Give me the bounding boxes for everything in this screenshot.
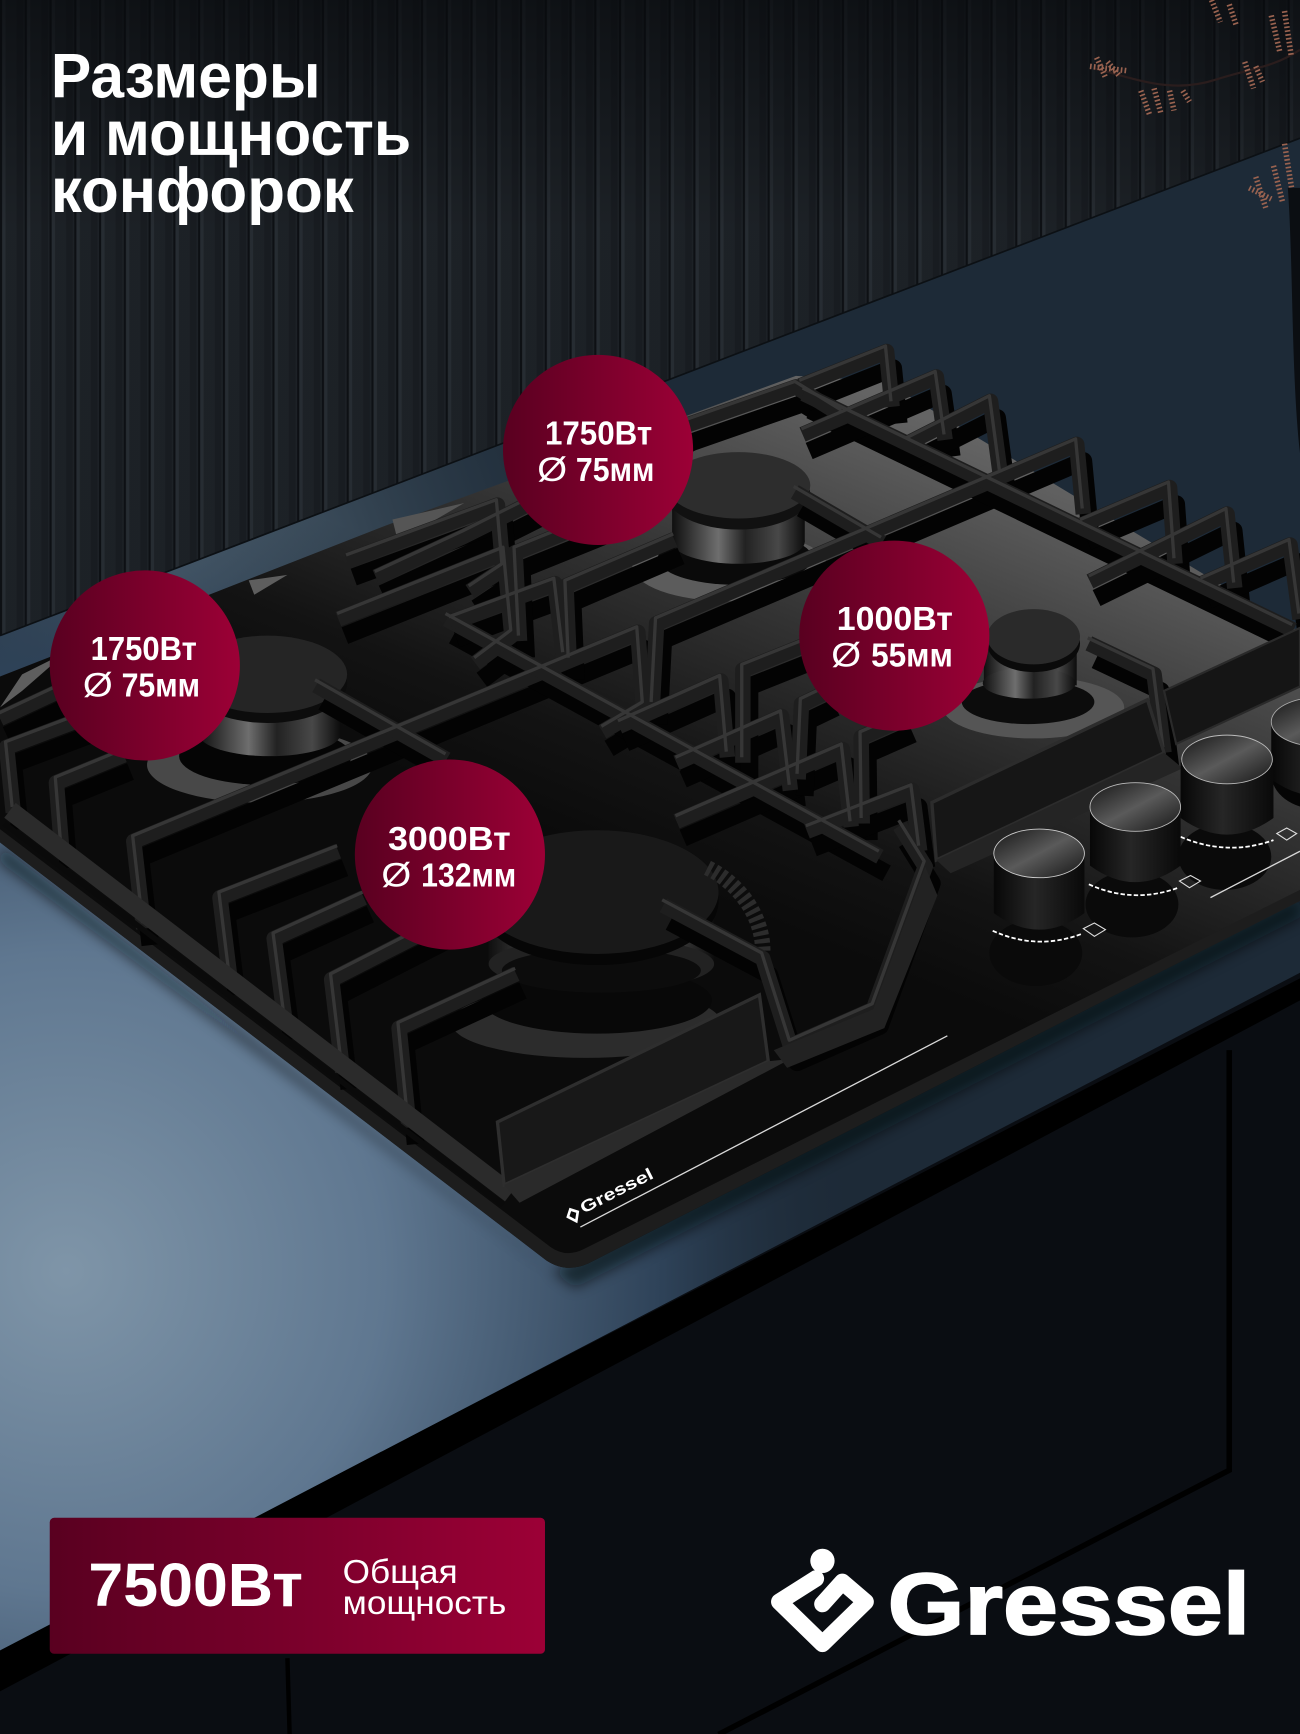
badge: small burner: 1000Вт	[837, 601, 953, 638]
burner: large front	[451, 830, 763, 1058]
badge: large burner: Ø	[381, 857, 411, 895]
brand logo: Gressel	[888, 1555, 1250, 1653]
brand logo	[779, 1549, 1250, 1653]
branches with copper buds	[1090, 0, 1300, 208]
badge: left burner: 75мм	[122, 667, 200, 704]
badge: small burner	[799, 541, 989, 731]
badge: left burner: 1750Вт	[91, 631, 197, 668]
total power box: Общая	[343, 1554, 458, 1591]
burner: small right	[943, 609, 1124, 738]
total power box	[50, 1518, 545, 1654]
badge: large burner	[355, 759, 545, 950]
knobs	[989, 698, 1300, 986]
title: конфорок	[51, 156, 354, 226]
badge: top burner: Ø	[537, 451, 567, 489]
title	[51, 41, 411, 226]
vase at right edge	[1288, 188, 1300, 453]
burner: top	[632, 452, 827, 601]
title: Размеры	[51, 41, 321, 111]
badge: top burner: 75мм	[576, 452, 654, 489]
pan support grates	[0, 346, 1300, 1205]
badge: left burner	[50, 570, 240, 761]
total power box: 7500Вт	[88, 1551, 303, 1619]
title: и мощность	[51, 99, 411, 169]
total power box: мощность	[343, 1585, 506, 1622]
cabinet front	[0, 940, 1300, 1734]
hob glass panel	[0, 376, 1300, 1268]
small logo on hob: Gressel	[577, 1164, 656, 1217]
badge: small burner: 55мм	[871, 638, 953, 675]
background wall with vertical ribs	[0, 0, 1300, 774]
badge: top burner	[503, 355, 693, 545]
badge: top burner: 1750Вт	[545, 415, 652, 452]
hob decorative lines	[580, 851, 1300, 1227]
badge: small burner: Ø	[831, 637, 861, 675]
badge: large burner: 132мм	[421, 858, 516, 895]
badge: large burner: 3000Вт	[388, 821, 511, 858]
burner: left	[147, 636, 373, 803]
badge: left burner: Ø	[83, 666, 113, 704]
hob shadow	[0, 846, 1300, 1288]
small logo on hob	[563, 1164, 656, 1224]
